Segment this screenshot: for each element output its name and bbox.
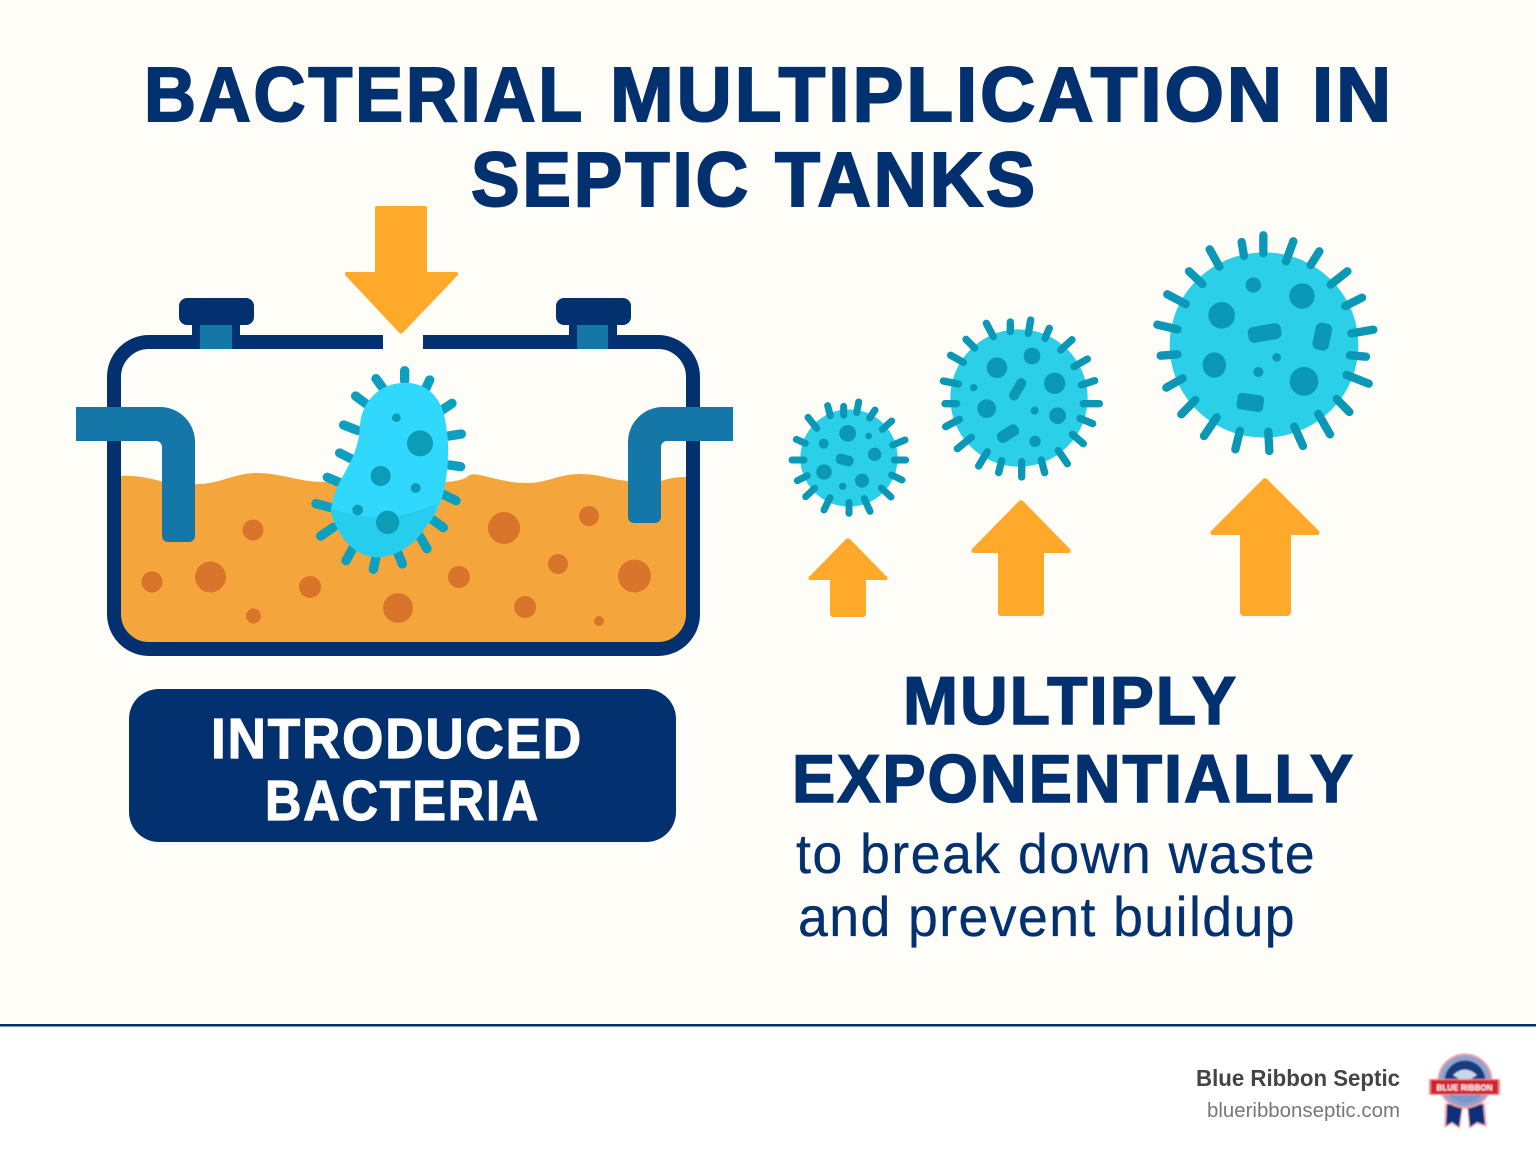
- icon: large bacterium: [1157, 235, 1373, 451]
- heading: multiply exponentially: EXPONENTIALLY: [792, 741, 1355, 817]
- arrow: small growth: [808, 538, 888, 617]
- heading: multiply exponentially: [792, 663, 1355, 817]
- sludge layer: [121, 473, 686, 642]
- text: purpose: to break down waste: [796, 822, 1316, 885]
- icon: introduced bacterium: [316, 371, 461, 569]
- footer brand text: [1196, 1065, 1400, 1122]
- title: BACTERIAL: [144, 52, 585, 138]
- title: SEPTIC: [471, 137, 751, 223]
- icon: blue ribbon logo: [1429, 1054, 1500, 1129]
- arrow: bacteria going in: [345, 206, 458, 333]
- arrow: large growth: [1210, 478, 1320, 616]
- title: MULTIPLICATION: [610, 52, 1285, 138]
- label: introduced bacteria: INTRODUCED: [211, 707, 583, 771]
- text: purpose: [796, 822, 1316, 948]
- right hatch: [556, 298, 631, 349]
- title: TANKS: [775, 137, 1038, 223]
- tank outline: [114, 342, 693, 649]
- arrow: medium growth: [971, 500, 1071, 616]
- sludge particles: [142, 506, 651, 626]
- label: introduced bacteria: [129, 689, 676, 842]
- icon: medium bacterium: [943, 320, 1099, 477]
- inlet pipe: [76, 407, 195, 542]
- panel: septic tank: [76, 298, 733, 649]
- left hatch: [179, 298, 254, 349]
- heading: multiply exponentially: MULTIPLY: [903, 663, 1238, 739]
- title: IN: [1312, 52, 1394, 138]
- title: [144, 52, 1394, 223]
- outlet pipe: [628, 407, 733, 523]
- footer brand text: Blue Ribbon Septic: [1196, 1065, 1400, 1091]
- icon: blue ribbon logo: BLUE RIBBON: [1436, 1082, 1492, 1092]
- text: purpose: and prevent buildup: [798, 885, 1296, 948]
- footer brand text: blueribbonseptic.com: [1207, 1100, 1400, 1122]
- label: introduced bacteria: BACTERIA: [265, 769, 540, 833]
- icon: small bacterium: [792, 402, 906, 513]
